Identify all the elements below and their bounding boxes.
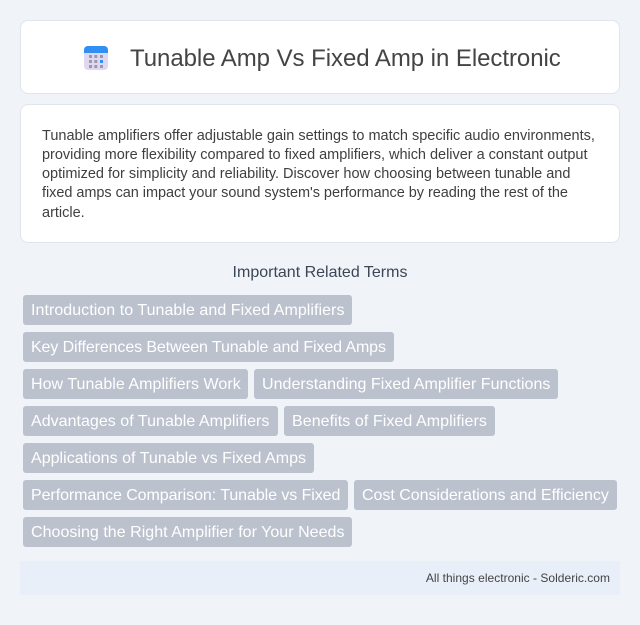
title: Tunable Amp Vs Fixed Amp in Electronic xyxy=(130,45,561,72)
tag: Choosing the Right Amplifier for Your Needs xyxy=(31,524,344,541)
tag xyxy=(23,480,348,510)
footer bar xyxy=(20,561,620,595)
intro text: optimized for simplicity and reliability. Discover how choosing between tunable and xyxy=(42,166,570,182)
tag xyxy=(354,480,617,510)
icon: calendar xyxy=(84,46,108,70)
tag xyxy=(23,406,278,436)
intro text: fixed amps can impact your sound system's performance by reading the rest of the xyxy=(42,185,568,201)
tag: Applications of Tunable vs Fixed Amps xyxy=(31,450,306,467)
tag xyxy=(254,369,558,399)
tag xyxy=(23,517,352,547)
intro text xyxy=(42,128,595,221)
tag: Understanding Fixed Amplifier Functions xyxy=(262,376,550,393)
tag xyxy=(284,406,495,436)
footer text: All things electronic - Solderic.com xyxy=(426,571,610,585)
header panel xyxy=(20,20,620,94)
tag: Introduction to Tunable and Fixed Amplifiers xyxy=(31,302,344,319)
tag: Performance Comparison: Tunable vs Fixed xyxy=(31,487,340,504)
tag list xyxy=(23,295,617,547)
tag xyxy=(23,295,352,325)
tag xyxy=(23,369,248,399)
tag: Benefits of Fixed Amplifiers xyxy=(292,413,487,430)
tag xyxy=(23,332,394,362)
intro panel xyxy=(20,104,620,243)
related terms heading: Important Related Terms xyxy=(233,264,407,281)
tag: How Tunable Amplifiers Work xyxy=(31,376,241,393)
tag: Cost Considerations and Efficiency xyxy=(362,487,609,504)
intro text: providing more flexibility compared to fixed amplifiers, which deliver a constant output xyxy=(42,147,587,163)
intro text: article. xyxy=(42,205,85,221)
intro text: Tunable amplifiers offer adjustable gain settings to match specific audio environments, xyxy=(42,128,595,144)
tag: Key Differences Between Tunable and Fixed Amps xyxy=(31,339,386,356)
tag xyxy=(23,443,314,473)
tag: Advantages of Tunable Amplifiers xyxy=(31,413,269,430)
